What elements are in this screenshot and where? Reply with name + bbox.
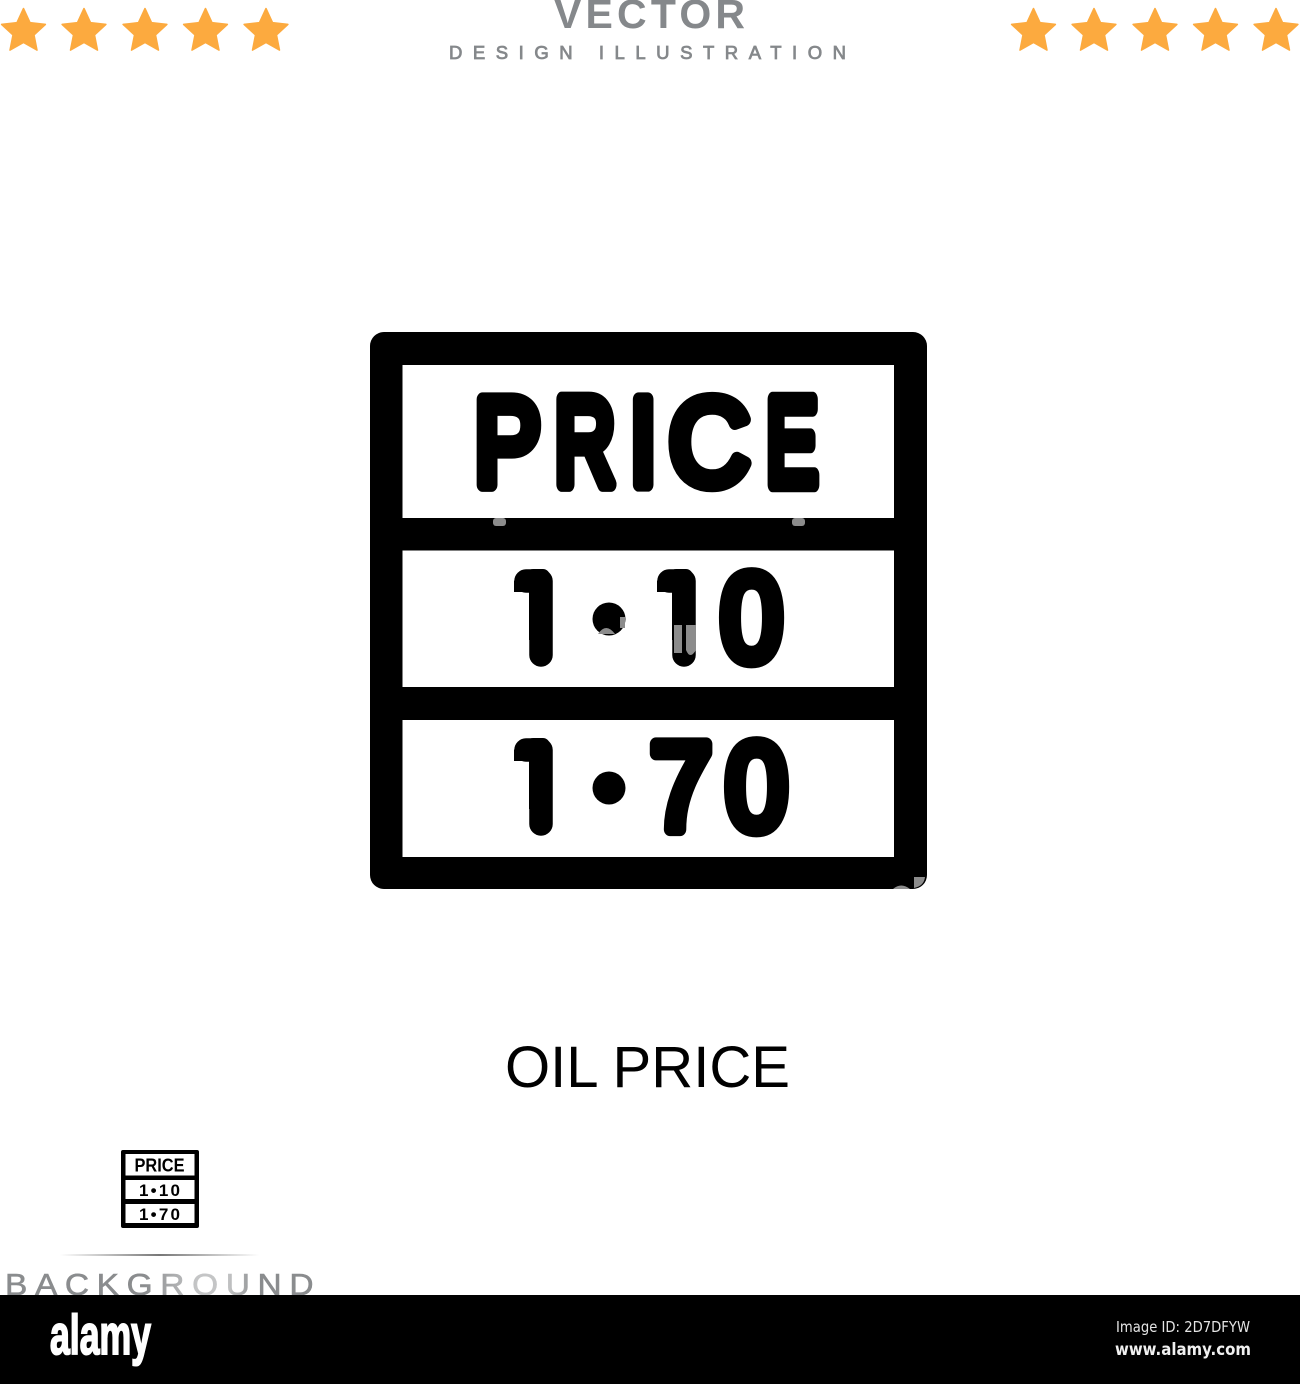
watermark fragments [493, 518, 925, 889]
board text: 1.10: 1 [644, 550, 713, 688]
board text: 1.70: 7 [650, 718, 712, 856]
small board text: 1.70: 1•70 [139, 1205, 180, 1224]
board text: PRICE: E [766, 373, 818, 511]
icon: left rating stars [2, 8, 288, 50]
footer bar [0, 1295, 1300, 1384]
website: www.alamy.com [1115, 1340, 1251, 1359]
board text: PRICE: C [669, 374, 750, 511]
board text: 1.70: 0 [726, 718, 787, 856]
icon: small oil price board [121, 1150, 199, 1228]
divider line [60, 1254, 259, 1256]
small board text: PRICE: PRICE [134, 1156, 184, 1176]
board text: 1.10 [495, 549, 782, 688]
board text: PRICE: I [630, 373, 657, 511]
board text: PRICE: P [474, 374, 541, 511]
board text: 1.70: 1 [501, 720, 570, 856]
board text: 1.70 [495, 718, 787, 856]
board frame [370, 332, 927, 889]
image id: Image ID: 2D7DFYW [1116, 1318, 1250, 1336]
board text: 1.10: 0 [721, 549, 782, 687]
caption: OIL PRICE: OIL PRICE [505, 1035, 790, 1100]
icon: main oil price board [370, 332, 927, 889]
icon: right rating stars [1012, 8, 1298, 50]
label: BACKGROUND: BACKGROUND [5, 1267, 321, 1302]
subheading: DESIGN ILLUSTRATION: DESIGN ILLUSTRATION [449, 42, 846, 63]
board text: 1.10: 1 [501, 550, 570, 688]
board text: PRICE: R [555, 375, 615, 511]
small board text: 1.10: 1•10 [139, 1181, 180, 1200]
board text: PRICE [474, 373, 818, 511]
logo: alamy: alamy [50, 1303, 151, 1366]
